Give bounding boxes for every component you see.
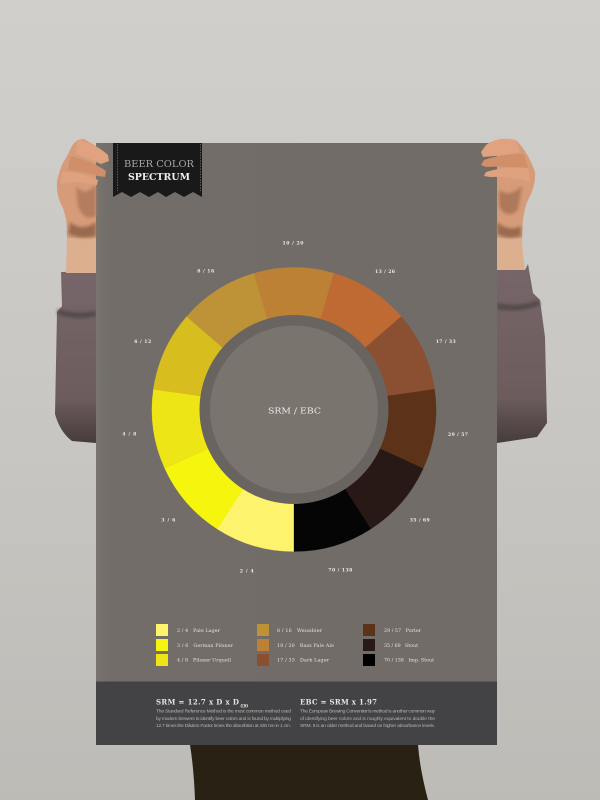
ring value labels: 29 / 57 (448, 432, 468, 438)
right hand and forearm (481, 139, 535, 270)
right sleeve (497, 264, 547, 443)
left sleeve (55, 271, 96, 443)
left hand and forearm (57, 139, 109, 273)
person trousers (190, 745, 428, 800)
poster panel (96, 143, 497, 682)
legend: 2 / 4 Pale Lager (177, 628, 221, 634)
ring value labels: 2 / 4 (240, 569, 254, 575)
ribbon title line 2: SPECTRUM (128, 173, 190, 183)
SRM formula: SRM = 12.7 x D x D (156, 698, 239, 706)
EBC description: of identifying beer colors and is roughly equivalent to double the (300, 716, 435, 722)
legend: 29 / 57 Porter (384, 628, 422, 634)
ring value labels: 10 / 20 (282, 240, 304, 246)
legend: 3 / 6 German Pilsner (177, 643, 234, 649)
EBC formula: EBC = SRM x 1.97 (300, 698, 377, 706)
ring value labels: 70 / 138 (328, 568, 352, 574)
legend: 70 / 138 Imp. Stout (384, 658, 434, 664)
EBC description: The European Brewing Convention's method is another common way (300, 708, 436, 714)
donut centre disc (210, 326, 378, 494)
legend: 10 / 20 Bass Pale Ale (277, 643, 334, 649)
ring value labels: 35 / 69 (410, 518, 430, 524)
ring value labels: 8 / 16 (197, 269, 214, 275)
legend: 4 / 8 Pilsner Urquell (177, 658, 231, 664)
SRM description: 12.7 times the Dilution Factor times the absorbtion at 430 nm in 1 cm. (156, 723, 291, 729)
donut inner ring (200, 315, 388, 504)
SRM description: The Standard Reference Method is the most common method used (156, 708, 291, 714)
legend: 35 / 69 Stout (384, 643, 418, 649)
EBC description (300, 708, 436, 729)
legend (156, 624, 434, 666)
ring value labels: 6 / 12 (134, 339, 151, 345)
legend: 17 / 33 Dark Lager (277, 658, 330, 664)
centre label: SRM / EBC (268, 406, 321, 416)
donut chart: SRM/EBC colours (152, 268, 436, 552)
SRM description (156, 708, 291, 729)
ribbon badge (113, 143, 202, 197)
ring value labels (122, 240, 468, 575)
legend: 8 / 16 Weissbier (277, 628, 323, 634)
EBC description: SRM. It is an older method and based on higher absorbance levels. (300, 723, 435, 729)
ring value labels: 4 / 8 (122, 431, 136, 437)
SRM formula subscript: 430 (240, 704, 248, 710)
ribbon title line 1: BEER COLOR (124, 159, 195, 170)
ring value labels: 13 / 26 (375, 269, 395, 275)
footer panel (96, 682, 497, 745)
ring value labels: 3 / 6 (161, 518, 175, 524)
ring value labels: 17 / 33 (436, 339, 456, 345)
SRM description: by modern brewers to identify beer colors and is found by multiplying (156, 716, 291, 722)
